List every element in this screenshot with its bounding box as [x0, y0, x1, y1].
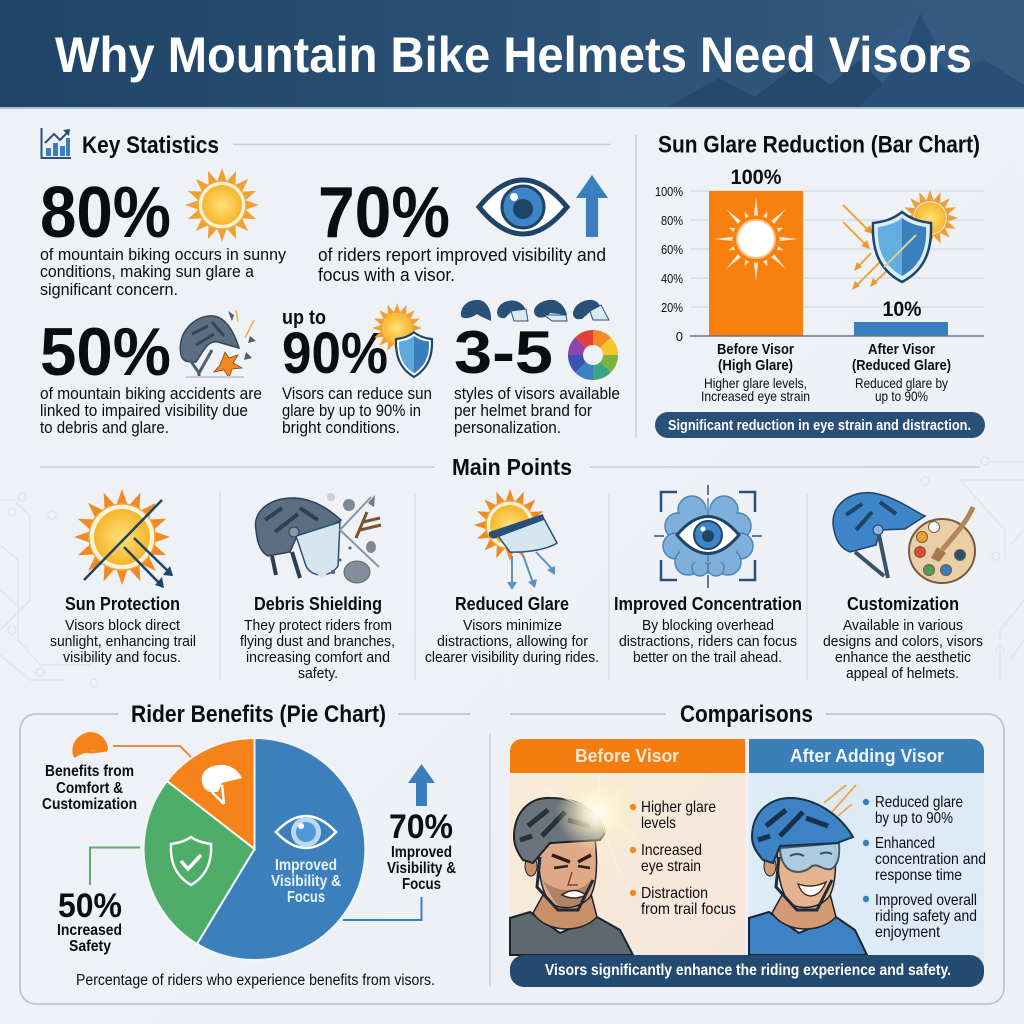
point: improved concentration: By blocking overhead [642, 617, 774, 634]
callout: eye strain [655, 412, 985, 438]
stat: 3-5 styles [454, 300, 620, 437]
bar: before visor [709, 191, 803, 336]
heading: main points: Main Points [452, 454, 572, 480]
callout: comfort and customization: Comfort & [56, 780, 123, 797]
stat: 80 percent: of mountain biking occurs in sunny [40, 245, 286, 264]
illustration: smiling rider with visor [749, 785, 867, 955]
stat: 3-5 styles: personalization. [454, 418, 561, 437]
bar labels: Before Visor [717, 341, 794, 358]
callout: eye strain: Significant reduction in eye strain and distraction. [668, 418, 971, 434]
callout: improved visibility: Focus [402, 876, 441, 893]
point: sun protection: sunlight, enhancing trail [50, 633, 196, 650]
panel: comparisons [510, 701, 986, 987]
stat: 3-5 styles: styles of visors available [454, 384, 620, 403]
illustration: squinting rider [510, 770, 640, 955]
list: after adding visor: by up to 90% [875, 810, 953, 827]
pie label: improved visibility: Focus [287, 889, 325, 906]
list: after adding visor: Reduced glare [875, 794, 963, 811]
list: after adding visor: riding safety and [875, 908, 977, 925]
icon: chart trend [42, 128, 71, 158]
icon: four visor styles [461, 300, 609, 321]
callout: improved visibility [343, 764, 456, 920]
panel: key statistics [40, 128, 620, 437]
point: customization: designs and colors, visors [823, 633, 983, 650]
icon: sun behind visor [474, 489, 557, 590]
point: customization: enhance the aesthetic [835, 649, 971, 666]
point: customization: appeal of helmets. [846, 665, 959, 682]
icon: eye [479, 180, 567, 234]
callout: riding experience [510, 955, 984, 987]
bar labels: (Reduced Glare) [852, 357, 951, 374]
point: reduced glare: Reduced Glare [455, 594, 569, 614]
stat: 70 percent: focus with a visor. [318, 265, 455, 285]
point: reduced glare: clearer visibility during rides. [425, 649, 599, 666]
stat: up to 90 percent: glare by up to 90% in [282, 401, 421, 420]
icon: shield blocking sun [843, 190, 958, 290]
point: improved concentration: better on the trail ahead. [633, 649, 782, 666]
bar chart: 100% [655, 184, 683, 199]
point: customization: Customization [847, 594, 959, 614]
heading: key statistics: Key Statistics [82, 132, 219, 159]
callout: comfort and customization [42, 732, 191, 813]
point: sun protection [50, 489, 196, 666]
callout: improved visibility: Improved [391, 844, 452, 861]
icon: helmet impact [180, 310, 256, 378]
callout: increased safety: Increased [57, 922, 122, 939]
list: before visor: Distraction [641, 885, 708, 902]
list: before visor: Higher glare [641, 799, 716, 816]
list: after adding visor [863, 794, 986, 941]
icon: helmet with visor and debris [255, 493, 381, 583]
icon: color wheel [568, 330, 618, 380]
heading: comparisons: Comparisons [680, 701, 813, 728]
bar chart: 10% [882, 298, 922, 321]
point: debris shielding: increasing comfort and [246, 649, 390, 666]
header mountains [667, 13, 1024, 107]
pie chart [144, 738, 365, 960]
list: before visor: levels [641, 815, 676, 832]
bar labels: Higher glare levels, [704, 375, 807, 391]
callout: comfort and customization: Benefits from [45, 763, 134, 780]
point: debris shielding: Debris Shielding [254, 594, 382, 614]
panel: main points [40, 454, 983, 682]
stat: up to 90 percent [282, 303, 432, 437]
point: reduced glare [425, 489, 599, 666]
list: after adding visor: Improved overall [875, 892, 977, 909]
bar chart: 0 [676, 329, 683, 344]
icon: sun with slash [74, 489, 173, 588]
icon: shield with check [171, 837, 211, 885]
stat: up to 90 percent: 90% [282, 321, 388, 386]
bar chart: 40% [661, 271, 683, 286]
stat: 70 percent [318, 173, 608, 285]
column: after adding visor: After Adding Visor [790, 746, 944, 766]
point: sun protection: Sun Protection [65, 594, 180, 614]
stat: 70 percent: 70% [318, 173, 450, 253]
point: improved concentration: distractions, riders can focus [619, 633, 797, 650]
list: after adding visor: concentration and [875, 851, 986, 868]
bar labels: Reduced glare by [855, 375, 948, 391]
callout: improved visibility: 70% [389, 808, 453, 846]
stat: 50 percent [40, 310, 262, 437]
stat: 80 percent: 80% [40, 173, 171, 253]
callout: comfort and customization: Customization [42, 796, 137, 813]
point: debris shielding: flying dust and branches, [240, 633, 395, 650]
icon: up arrow [576, 175, 608, 237]
list: after adding visor: Enhanced [875, 835, 935, 852]
bar labels [701, 341, 951, 404]
bar chart: 80% [661, 213, 683, 228]
pie label: improved visibility [271, 857, 341, 906]
bar labels: After Visor [868, 341, 935, 358]
stat: up to 90 percent: up to [282, 307, 326, 329]
title: Why Mountain Bike Helmets Need Visors [55, 27, 972, 83]
point: reduced glare: Visors minimize [463, 617, 562, 634]
bar: after visor [854, 322, 948, 336]
column: before visor: Before Visor [575, 746, 679, 766]
stat: 50 percent: of mountain biking accidents are [40, 384, 262, 403]
list: before visor [630, 799, 736, 918]
icon: white helmet [202, 765, 242, 804]
point: debris shielding: They protect riders from [244, 617, 392, 634]
stat: 80 percent [40, 168, 286, 299]
icon: helmet and palette [833, 493, 975, 583]
stat: 80 percent: conditions, making sun glare a [40, 262, 255, 281]
point: improved concentration: Improved Concentration [614, 594, 802, 614]
bar labels: up to 90% [875, 388, 928, 404]
stat: 80 percent: significant concern. [40, 280, 178, 299]
column: after adding visor [749, 739, 986, 963]
callout: increased safety: 50% [58, 887, 122, 925]
heading: bar chart: Sun Glare Reduction (Bar Chart) [658, 132, 980, 158]
bar chart: 60% [661, 242, 683, 257]
list: after adding visor: enjoyment [875, 924, 940, 941]
bar labels: Increased eye strain [701, 388, 810, 404]
point: improved concentration [614, 485, 802, 666]
point: sun protection: Visors block direct [65, 617, 181, 634]
bar labels: (High Glare) [718, 357, 793, 374]
stat: 50 percent: linked to impaired visibility due [40, 401, 248, 420]
pie label: improved visibility: Visibility & [271, 873, 341, 890]
panel: rider benefits pie chart [42, 701, 456, 989]
list: before visor: Increased [641, 842, 702, 859]
stat: 70 percent: of riders report improved visibility and [318, 245, 606, 265]
stat: 50 percent: 50% [40, 314, 171, 390]
heading: rider benefits: Rider Benefits (Pie Chart) [131, 701, 386, 728]
icon: brain with eye [654, 485, 762, 588]
stat: 3-5 styles: per helmet brand for [454, 401, 592, 420]
icon: sun and shield [372, 303, 432, 377]
bar chart: 20% [661, 300, 683, 315]
point: debris shielding: safety. [298, 665, 338, 682]
icon: white eye [276, 816, 336, 848]
icon: sun [185, 168, 259, 242]
point: customization: Available in various [843, 617, 963, 634]
point: debris shielding [240, 493, 395, 682]
pie caption: Percentage of riders who experience benefits from visors. [76, 972, 435, 989]
stat: 50 percent: to debris and glare. [40, 418, 169, 437]
pie label: improved visibility: Improved [275, 857, 337, 874]
panel: sun glare bar chart [655, 132, 985, 438]
list: after adding visor: response time [875, 867, 962, 884]
point: sun protection: visibility and focus. [63, 649, 181, 666]
point: reduced glare: distractions, allowing for [437, 633, 588, 650]
list: before visor: eye strain [641, 858, 701, 875]
list: before visor: from trail focus [641, 901, 736, 918]
callout: increased safety: Safety [69, 938, 111, 955]
callout: improved visibility: Visibility & [387, 860, 456, 877]
callout: increased safety [57, 848, 140, 955]
bar chart: 100% [730, 166, 782, 189]
point: customization [823, 493, 983, 682]
column: before visor [510, 739, 745, 963]
stat: 3-5 styles: 3-5 [454, 319, 553, 386]
bar chart [655, 166, 984, 404]
stat: up to 90 percent: bright conditions. [282, 418, 400, 437]
callout: riding experience: Visors significantly enhance the riding experience and safety. [545, 962, 951, 979]
header banner [0, 0, 1024, 109]
stat: up to 90 percent: Visors can reduce sun [282, 384, 432, 403]
